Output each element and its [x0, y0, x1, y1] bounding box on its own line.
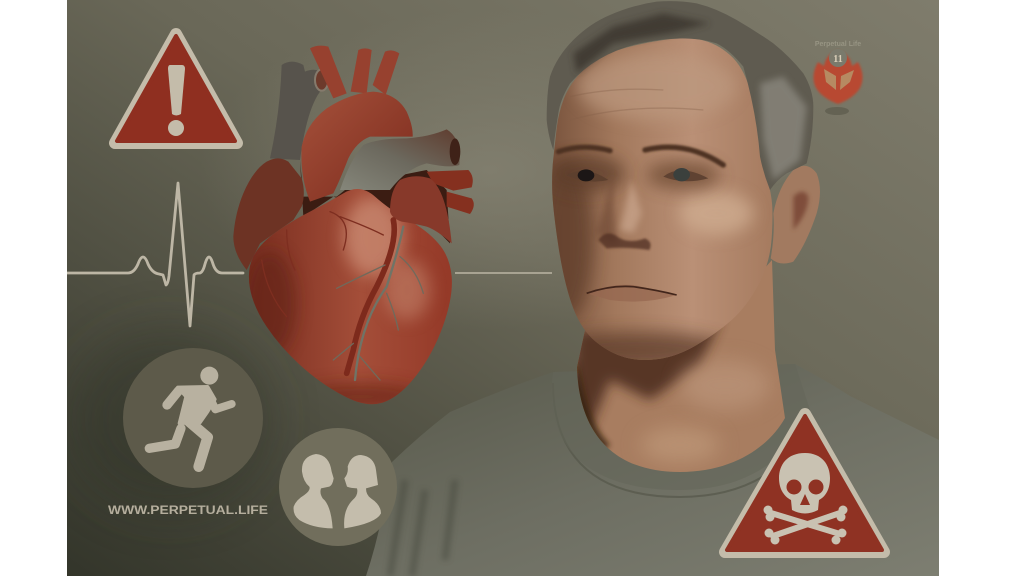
- warning triangle: [115, 34, 237, 143]
- left atrium: [390, 176, 452, 243]
- skull warning triangle: [725, 414, 884, 552]
- pulmonary veins: [427, 170, 474, 214]
- perpetual life logo: Perpetual Life: [815, 41, 861, 48]
- eyebrows: [558, 147, 723, 165]
- ventricles: [248, 189, 452, 404]
- hair: [547, 1, 813, 190]
- coronary vessels: [262, 212, 423, 380]
- nose: [598, 233, 651, 250]
- running icon: [123, 348, 263, 488]
- mouth: [587, 285, 677, 302]
- skull: [779, 453, 830, 514]
- man's head: [540, 1, 820, 368]
- website url: WWW.PERPETUAL.LIFE: [108, 505, 268, 517]
- aortic arch: [301, 92, 413, 202]
- pulmonary artery: [340, 129, 460, 190]
- aorta branches: [310, 46, 399, 98]
- dark heart underlay: [300, 160, 450, 243]
- right atrium: [233, 158, 304, 270]
- superior vena cava: [270, 62, 328, 160]
- ecg line continuation: [455, 272, 552, 274]
- face: [552, 38, 772, 360]
- left eye: [578, 169, 608, 182]
- right eye: [663, 168, 708, 181]
- couple icon: [279, 428, 397, 546]
- ear: [771, 166, 820, 264]
- anatomical heart: [233, 46, 474, 413]
- shirt: [366, 391, 939, 576]
- crossbones: [764, 506, 848, 544]
- perpetual life logo: [813, 41, 863, 115]
- exclamation mark: [168, 65, 185, 136]
- neck: [577, 260, 785, 472]
- perpetual life logo: 11: [833, 54, 843, 65]
- ecg waveform: [66, 183, 243, 326]
